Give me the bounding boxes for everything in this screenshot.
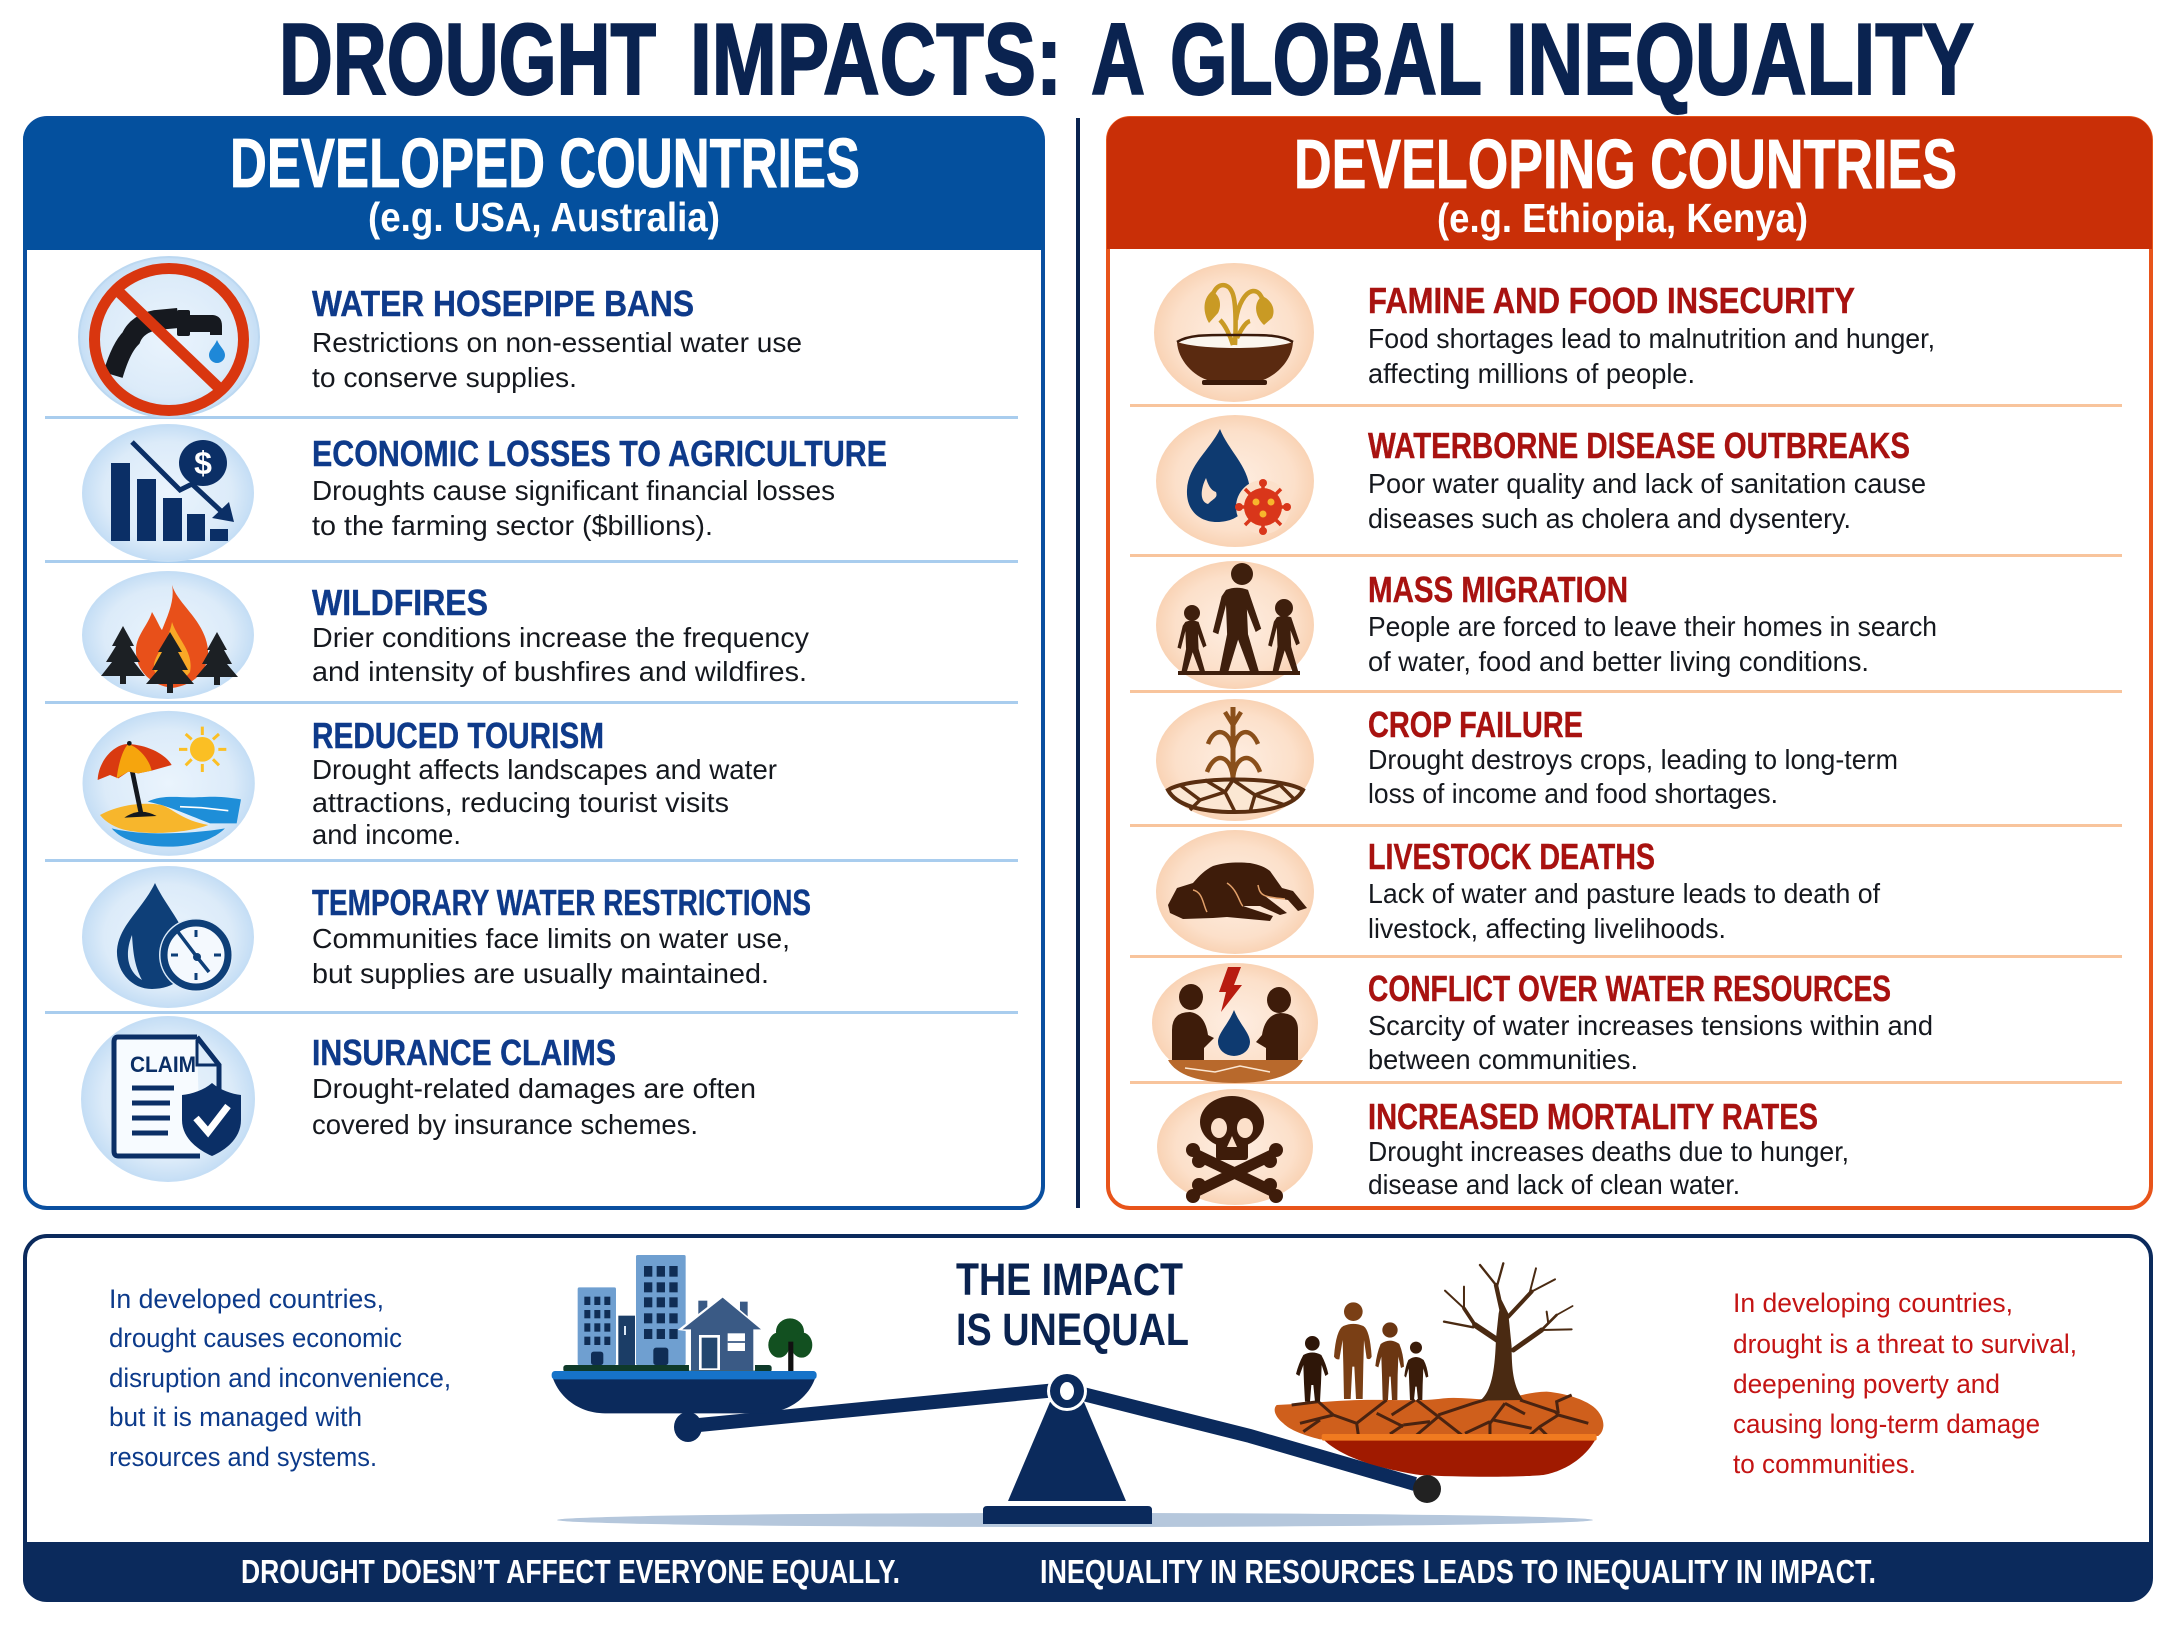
item: insurance claims <box>82 1017 756 1181</box>
item: water hosepipe bans <box>79 257 802 417</box>
subheading: developing examples: (e.g. Ethiopia, Kenya) <box>1437 195 1808 241</box>
item description <box>1368 878 1880 944</box>
item description: Drought-related damages are often <box>312 1073 756 1104</box>
item description: Droughts cause significant financial losses <box>312 475 835 506</box>
text: developed summary: resources and systems. <box>109 1442 377 1472</box>
item: crop failure <box>1156 699 1898 821</box>
item description: and intensity of bushfires and wildfires. <box>312 656 807 687</box>
scale beam <box>699 1390 1415 1484</box>
item: increased mortality <box>1157 1089 1849 1205</box>
icon: beach umbrella and sun <box>83 712 254 855</box>
item: livestock deaths <box>1156 830 1880 954</box>
scale base <box>983 1506 1152 1524</box>
item description: to conserve supplies. <box>312 362 577 393</box>
title: IMPACTS: <box>690 4 1062 116</box>
item description: livestock, affecting livelihoods. <box>1368 913 1726 944</box>
icon: falling bar chart with dollar <box>83 425 253 561</box>
text: developing summary: drought is a threat to survival, <box>1733 1329 2077 1359</box>
item description: Communities face limits on water use, <box>312 923 790 954</box>
item heading: LIVESTOCK DEATHS <box>1368 836 1655 877</box>
item: wildfires <box>83 572 809 698</box>
item description: loss of income and food shortages. <box>1368 778 1778 809</box>
text: developed summary <box>109 1284 451 1472</box>
text: developing summary: In developing countries, <box>1733 1288 2013 1318</box>
item description <box>1368 468 1926 534</box>
item heading: REDUCED TOURISM <box>312 715 604 756</box>
item: economic losses <box>83 425 887 561</box>
icon: water drop and clock <box>83 867 253 1007</box>
heading: the impact is unequal: IS UNEQUAL <box>956 1304 1189 1355</box>
heading: the impact is unequal: THE IMPACT <box>956 1254 1183 1305</box>
item description <box>312 475 835 541</box>
item description: diseases such as cholera and dysentery. <box>1368 503 1851 534</box>
icon: two people and a water drop <box>1152 963 1318 1083</box>
item: temporary water restrictions <box>83 867 811 1007</box>
item heading: CROP FAILURE <box>1368 704 1583 745</box>
item description <box>312 1073 756 1140</box>
icon: withered crop on cracked soil <box>1156 699 1314 821</box>
item heading: WATERBORNE DISEASE OUTBREAKS <box>1368 425 1910 466</box>
item description <box>312 327 802 393</box>
panel header: developed <box>23 118 1044 250</box>
icon: claim document and shield: CLAIM <box>130 1052 196 1077</box>
item description <box>1368 1136 1849 1200</box>
item description <box>312 622 809 687</box>
text: developing summary <box>1733 1288 2077 1479</box>
subheading: developed examples: (e.g. USA, Australia) <box>368 194 720 240</box>
panel: developed countries <box>23 118 1044 1208</box>
item: famine <box>1154 263 1935 402</box>
item description: Drought increases deaths due to hunger, <box>1368 1136 1849 1167</box>
item heading: CONFLICT OVER WATER RESOURCES <box>1368 968 1891 1009</box>
item description <box>1368 323 1935 389</box>
right pan with drought scene <box>1275 1263 1603 1477</box>
banner <box>23 1542 2152 1601</box>
item: reduced tourism <box>83 712 777 855</box>
item heading: INCREASED MORTALITY RATES <box>1368 1096 1818 1137</box>
item description: but supplies are usually maintained. <box>312 958 769 989</box>
item description: affecting millions of people. <box>1368 358 1695 389</box>
item description <box>1368 744 1898 809</box>
illustration: balance scale <box>552 1255 1603 1527</box>
item description: disease and lack of clean water. <box>1368 1169 1740 1200</box>
item description: of water, food and better living conditions. <box>1368 646 1869 677</box>
text: developing summary: to communities. <box>1733 1449 1916 1479</box>
left beam end <box>674 1412 702 1442</box>
fulcrum <box>1008 1402 1126 1501</box>
title: INEQUALITY <box>1506 4 1974 116</box>
scale shadow <box>557 1513 1593 1527</box>
item: conflict over water <box>1152 963 1933 1083</box>
item description: covered by insurance schemes. <box>312 1109 698 1140</box>
icon: banned hosepipe <box>79 257 259 417</box>
heading: developing countries: DEVELOPING COUNTRIES <box>1294 125 1957 203</box>
heading: the impact is unequal <box>956 1254 1189 1355</box>
text: developed summary: In developed countries, <box>109 1284 384 1314</box>
text: developed summary: disruption and inconvenience, <box>109 1363 451 1393</box>
item heading: TEMPORARY WATER RESTRICTIONS <box>312 882 811 923</box>
panel header: developing <box>1107 117 2152 249</box>
item heading: ECONOMIC LOSSES TO AGRICULTURE <box>312 433 887 474</box>
text: developed summary: but it is managed with <box>109 1402 362 1432</box>
text: developing summary: deepening poverty and <box>1733 1369 2000 1399</box>
title <box>279 4 1974 116</box>
item description: attractions, reducing tourist visits <box>312 787 729 818</box>
banner text right: INEQUALITY IN RESOURCES LEADS TO INEQUALITY IN IMPACT. <box>1040 1553 1876 1590</box>
panel: developing countries <box>1107 117 2152 1208</box>
text: developed summary: drought causes economic <box>109 1323 402 1353</box>
item description: Food shortages lead to malnutrition and hunger, <box>1368 323 1935 354</box>
title: GLOBAL <box>1170 4 1482 116</box>
item heading: WILDFIRES <box>312 582 488 623</box>
text: developing summary: causing long-term damage <box>1733 1409 2040 1439</box>
banner text left: DROUGHT DOESN’T AFFECT EVERYONE EQUALLY. <box>241 1553 900 1590</box>
icon: walking family <box>1156 561 1314 689</box>
item description: Restrictions on non-essential water use <box>312 327 802 358</box>
icon: bowl and wilted plant <box>1154 263 1314 402</box>
item description: Lack of water and pasture leads to death of <box>1368 878 1880 909</box>
item description: Poor water quality and lack of sanitation cause <box>1368 468 1926 499</box>
left pan with city <box>552 1255 817 1413</box>
item: mass migration <box>1156 561 1937 689</box>
item heading: FAMINE AND FOOD INSECURITY <box>1368 280 1855 321</box>
item description <box>1368 1010 1933 1075</box>
item heading: WATER HOSEPIPE BANS <box>312 283 694 324</box>
heading: developed countries: DEVELOPED COUNTRIES <box>230 124 860 202</box>
title: DROUGHT <box>279 4 656 116</box>
panel: the impact is unequal <box>23 1236 2152 1601</box>
item description <box>1368 611 1937 677</box>
icon: drop and virus <box>1156 415 1314 547</box>
item heading: INSURANCE CLAIMS <box>312 1032 616 1073</box>
right beam end <box>1413 1475 1441 1503</box>
item heading: MASS MIGRATION <box>1368 569 1628 610</box>
item: waterborne disease <box>1156 415 1926 547</box>
icon: skull and crossbones <box>1157 1089 1313 1205</box>
item description: People are forced to leave their homes in search <box>1368 611 1937 642</box>
item description <box>312 754 777 850</box>
pivot <box>1047 1371 1087 1411</box>
item description: Drought affects landscapes and water <box>312 754 777 785</box>
icon: falling bar chart with dollar: $ <box>194 445 212 481</box>
item description <box>312 923 790 989</box>
item description: Scarcity of water increases tensions within and <box>1368 1010 1933 1041</box>
icon: burning trees <box>83 572 253 698</box>
item description: to the farming sector ($billions). <box>312 510 713 541</box>
icon: fallen animal <box>1156 830 1314 954</box>
item description: Drier conditions increase the frequency <box>312 622 809 653</box>
icon: claim document and shield <box>82 1017 254 1181</box>
item description: and income. <box>312 819 461 850</box>
item description: between communities. <box>1368 1044 1638 1075</box>
title: A <box>1091 4 1145 116</box>
item description: Drought destroys crops, leading to long-term <box>1368 744 1898 775</box>
